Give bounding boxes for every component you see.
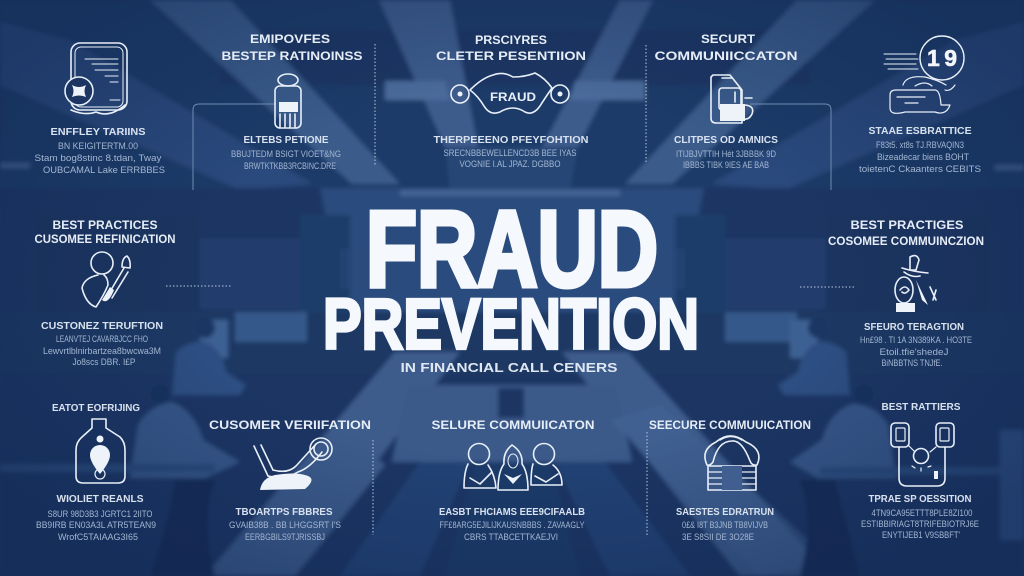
body text: Hn£98 . Tl 1A 3N389KA . HO3TE xyxy=(860,335,972,346)
icon: phone and cup xyxy=(711,75,753,123)
panel: bottom 4: 3E S8SII DE 3O28E xyxy=(682,532,754,543)
body text: FF£8ARG5EJILIJKAUSNBBBS . ZAVAAGLY xyxy=(440,520,585,531)
icon: numbered badge and laptop xyxy=(884,36,964,113)
title line: FRAUD: FRAUD xyxy=(366,188,658,309)
panel: top 4: COMMUNIICCATON xyxy=(654,49,798,63)
icon: clipped bag xyxy=(891,423,954,486)
panel: middle right: BiNBBTNS TNJfE. xyxy=(882,358,942,369)
heading: EMIPOVFES xyxy=(250,32,330,46)
panel: middle left: Lewvrtlblnirbartzea8bwcwa3M xyxy=(43,346,161,357)
icon: verification device xyxy=(254,438,332,490)
label: WIOLIET REANLS xyxy=(56,493,144,505)
heading: EATOT EOFRIJING xyxy=(52,402,140,414)
panel: top 5: toietenC Ckaanters CEBITS xyxy=(859,164,981,175)
label: THERPEEENO PFEYFOHTION xyxy=(434,134,588,146)
panel: top 4: IBBBS TIBK 9IES AE BAB xyxy=(683,160,769,171)
label: STAAE ESBRATTICE xyxy=(868,125,972,137)
panel: bottom 2 xyxy=(209,418,371,543)
panel: top 3: CLETER PESENTIION xyxy=(436,49,586,63)
panel: middle left: Jo8scs DBR. I£P xyxy=(72,357,136,368)
panel: top 2: BESTEP RATINOINSS xyxy=(222,49,362,63)
icon: telephone operator xyxy=(895,256,936,312)
panel: top 2 xyxy=(222,32,362,172)
panel: bottom 1: BB9IRB EN03A3L ATR5TEAN9 xyxy=(36,520,156,531)
heading: SECURT xyxy=(701,32,756,46)
panel: bottom 3: CBRS TTABCETTKAEJVI xyxy=(464,532,558,543)
panel: bottom 1: WrofC5TAIAAG3I65 xyxy=(58,532,138,543)
panel: top 3: VOGNIE I.AL JPAZ. DGBBO xyxy=(460,159,560,170)
label: SFEURO TERAGTION xyxy=(864,321,964,333)
panel: bottom 1 xyxy=(36,402,156,543)
icon: person with tool xyxy=(82,252,130,307)
icon label: FRAUD xyxy=(490,90,536,104)
body text: ITIJBJVTTIH Hét 3JBBBK 9D xyxy=(676,149,776,160)
body text: 0£& I8T B3JNB TB8VIJVB xyxy=(682,520,768,531)
body text: GVAIB38B . BB LHGGSRT I'S xyxy=(229,520,341,531)
subtitle: IN FINANCIAL CALL CENERS xyxy=(400,361,618,375)
label: SAESTES EDRATRUN xyxy=(676,506,774,518)
panel: middle right: COSOMEE COMMUINCZION xyxy=(828,234,984,248)
panel: top 3 xyxy=(434,33,588,170)
panel: bottom 5 xyxy=(861,401,979,541)
badge number: 19 xyxy=(927,45,957,71)
body text: LEANVTEJ CAVARBJCC FHO xyxy=(56,334,148,345)
icon: fraud emblem xyxy=(451,73,569,113)
heading: SEECURE COMMUUICATION xyxy=(649,418,811,432)
icon: three people xyxy=(464,444,562,490)
heading: PRSCIYRES xyxy=(475,33,547,47)
label: EASBT FHCIAMS EEE9CIFAALB xyxy=(439,506,585,518)
icon: document with badge xyxy=(65,43,127,114)
panel: bottom 4 xyxy=(649,418,811,543)
heading: SELURE COMMUIICATON xyxy=(432,418,594,432)
panel: middle right: Etoil.tfie'shedeJ xyxy=(880,347,949,358)
panel: top 4 xyxy=(654,32,798,171)
heading: BEST RATTIERS xyxy=(882,401,960,413)
panel: top 5: Bizeadecar biens BOHT xyxy=(877,152,969,163)
panel: top 1: OUBCAMAL Lake ERRBBES xyxy=(43,165,165,176)
decorative frames and dividers xyxy=(166,44,856,535)
panel: top 2: BRWTKTKBB3RCBINC.DRE xyxy=(244,161,336,172)
icon: shield tag with pin xyxy=(76,419,125,483)
body text: S8UR 98D3B3 JGRTC1 2IITO xyxy=(48,509,152,520)
label: ELTEBS PETIONE xyxy=(244,134,328,146)
label: ENFFLEY TARIINS xyxy=(50,126,146,138)
icon: bottle xyxy=(275,74,301,128)
body text: BBUJTEDM BSIGT VIOET&NG xyxy=(231,149,341,160)
body text: 4TN9CA95ETTT8PLE8ZI100 xyxy=(872,508,972,519)
body text: BN KEIGITERTM.00 xyxy=(58,141,138,152)
heading: CUSOMER VERIIFATION xyxy=(209,418,371,432)
label: CLITPES OD AMNICS xyxy=(674,134,778,146)
panel: top 1: Stam bog8stinc 8.tdan, Tway xyxy=(34,153,162,164)
label: TPRAE SP OESSITION xyxy=(868,493,972,505)
panel: bottom 5: ESTIBBIRIAGT8TRIFEBIOTRJ6E xyxy=(861,519,979,530)
body text: SRECNBBEWELLENCD3B BEE IYAS xyxy=(444,148,576,159)
panel: bottom 3 xyxy=(432,418,594,543)
icon: archive dome xyxy=(705,436,759,490)
panel: top 1 xyxy=(34,43,165,176)
panel: middle left: CUSOMEE REFINICATION xyxy=(34,232,176,246)
panel: top 5 xyxy=(859,36,981,175)
label: CUSTONEZ TERUFTION xyxy=(41,320,163,332)
heading: BEST PRACTICES xyxy=(52,218,158,232)
heading: BEST PRACTIGES xyxy=(850,218,964,232)
body text: F83t5. xt8s TJ.RBVAQIN3 xyxy=(876,140,964,151)
panel: middle right xyxy=(828,218,984,369)
title xyxy=(323,188,699,375)
title line: PREVENTION: PREVENTION xyxy=(323,286,699,364)
panel: bottom 2: EERBGBILS9TJRISSBJ xyxy=(245,532,325,543)
panel: bottom 5: ENYTIJEB1 V9SBBFT' xyxy=(882,530,960,541)
label: TBOARTPS FBBRES xyxy=(236,506,332,518)
panel: middle left xyxy=(34,218,176,368)
